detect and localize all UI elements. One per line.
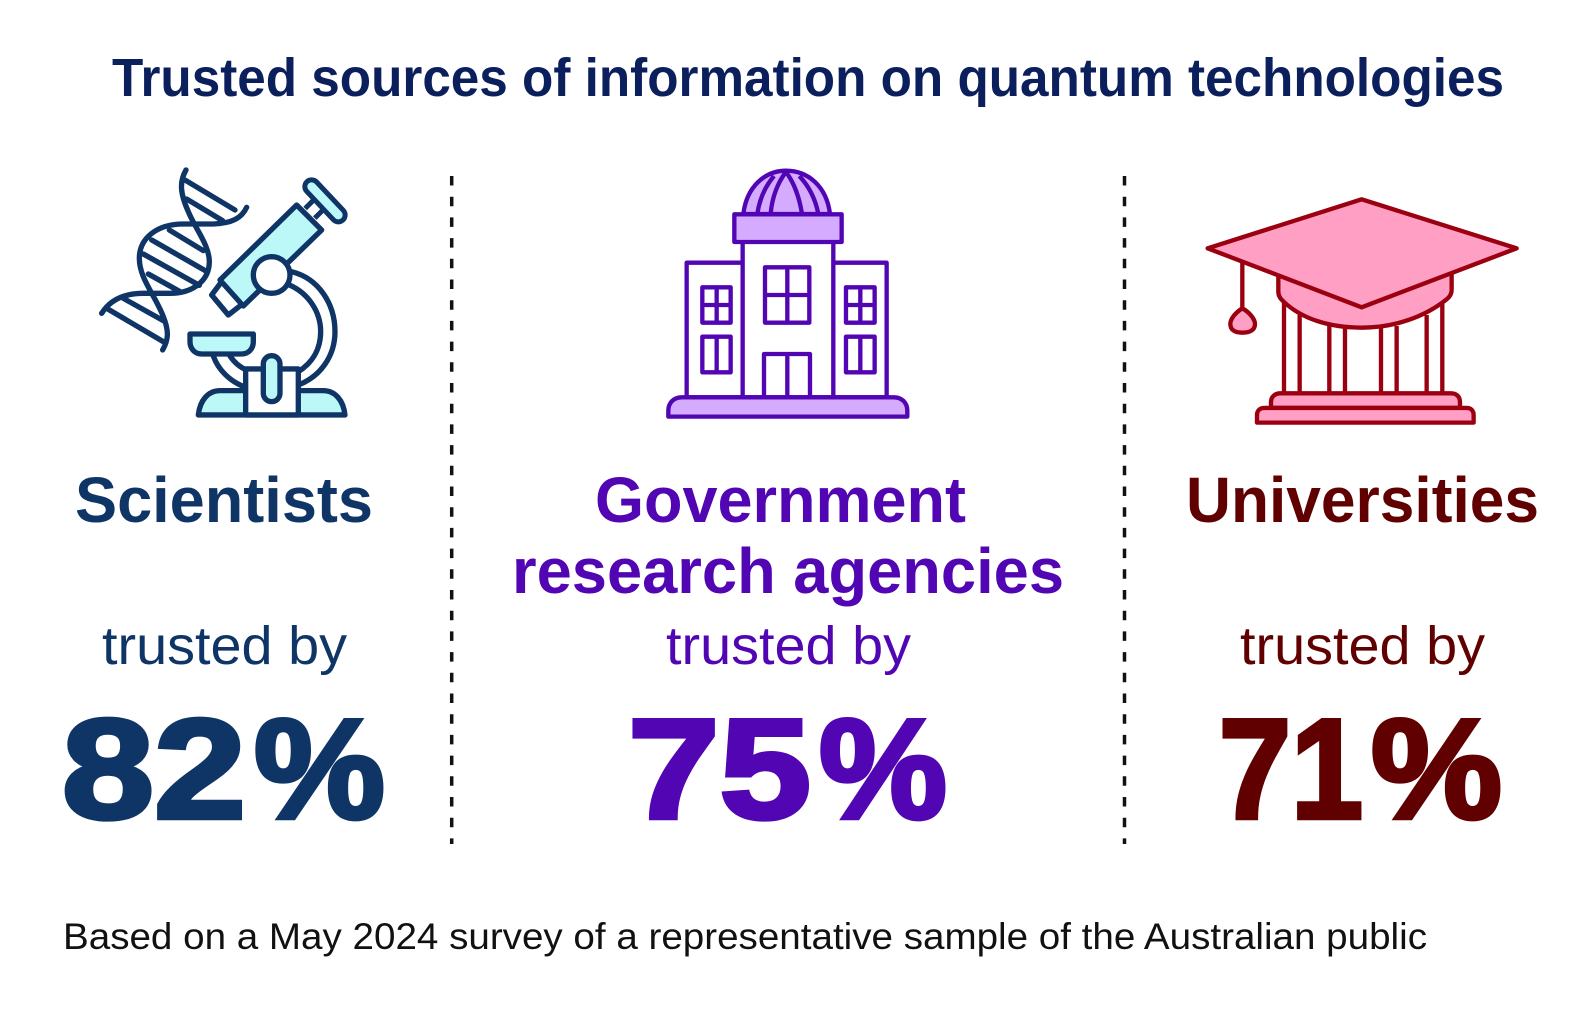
text: trusted by: trusted by [666, 616, 911, 676]
heading: Government research agencies: research agencies [512, 535, 1064, 607]
stat: 71%: % [1371, 690, 1502, 849]
text: trusted by: trusted by [1240, 616, 1485, 676]
panel: scientists [62, 170, 385, 849]
icon: graduation cap on columns [1208, 199, 1517, 423]
heading: Universities: Universities [1186, 464, 1539, 536]
panel: government research agencies [512, 171, 1064, 849]
icon: domed building [668, 171, 907, 417]
heading: Government research agencies: Government [595, 464, 966, 536]
stat: 82%: 82 [62, 690, 246, 849]
panel: universities [1186, 199, 1539, 849]
footnote: Based on a May 2024 survey of a representative sample of the Australian public [63, 916, 1427, 957]
heading: Scientists: Scientists [75, 464, 373, 536]
title: Trusted sources of information on quantum technologies [112, 48, 1504, 108]
stat: 82%: % [254, 690, 385, 849]
text: trusted by: trusted by [102, 616, 347, 676]
stat: 71%: 71 [1219, 690, 1363, 849]
stat: 75%: % [819, 690, 947, 849]
icon: DNA and microscope [102, 170, 345, 415]
stat: 75%: 75 [628, 690, 811, 849]
